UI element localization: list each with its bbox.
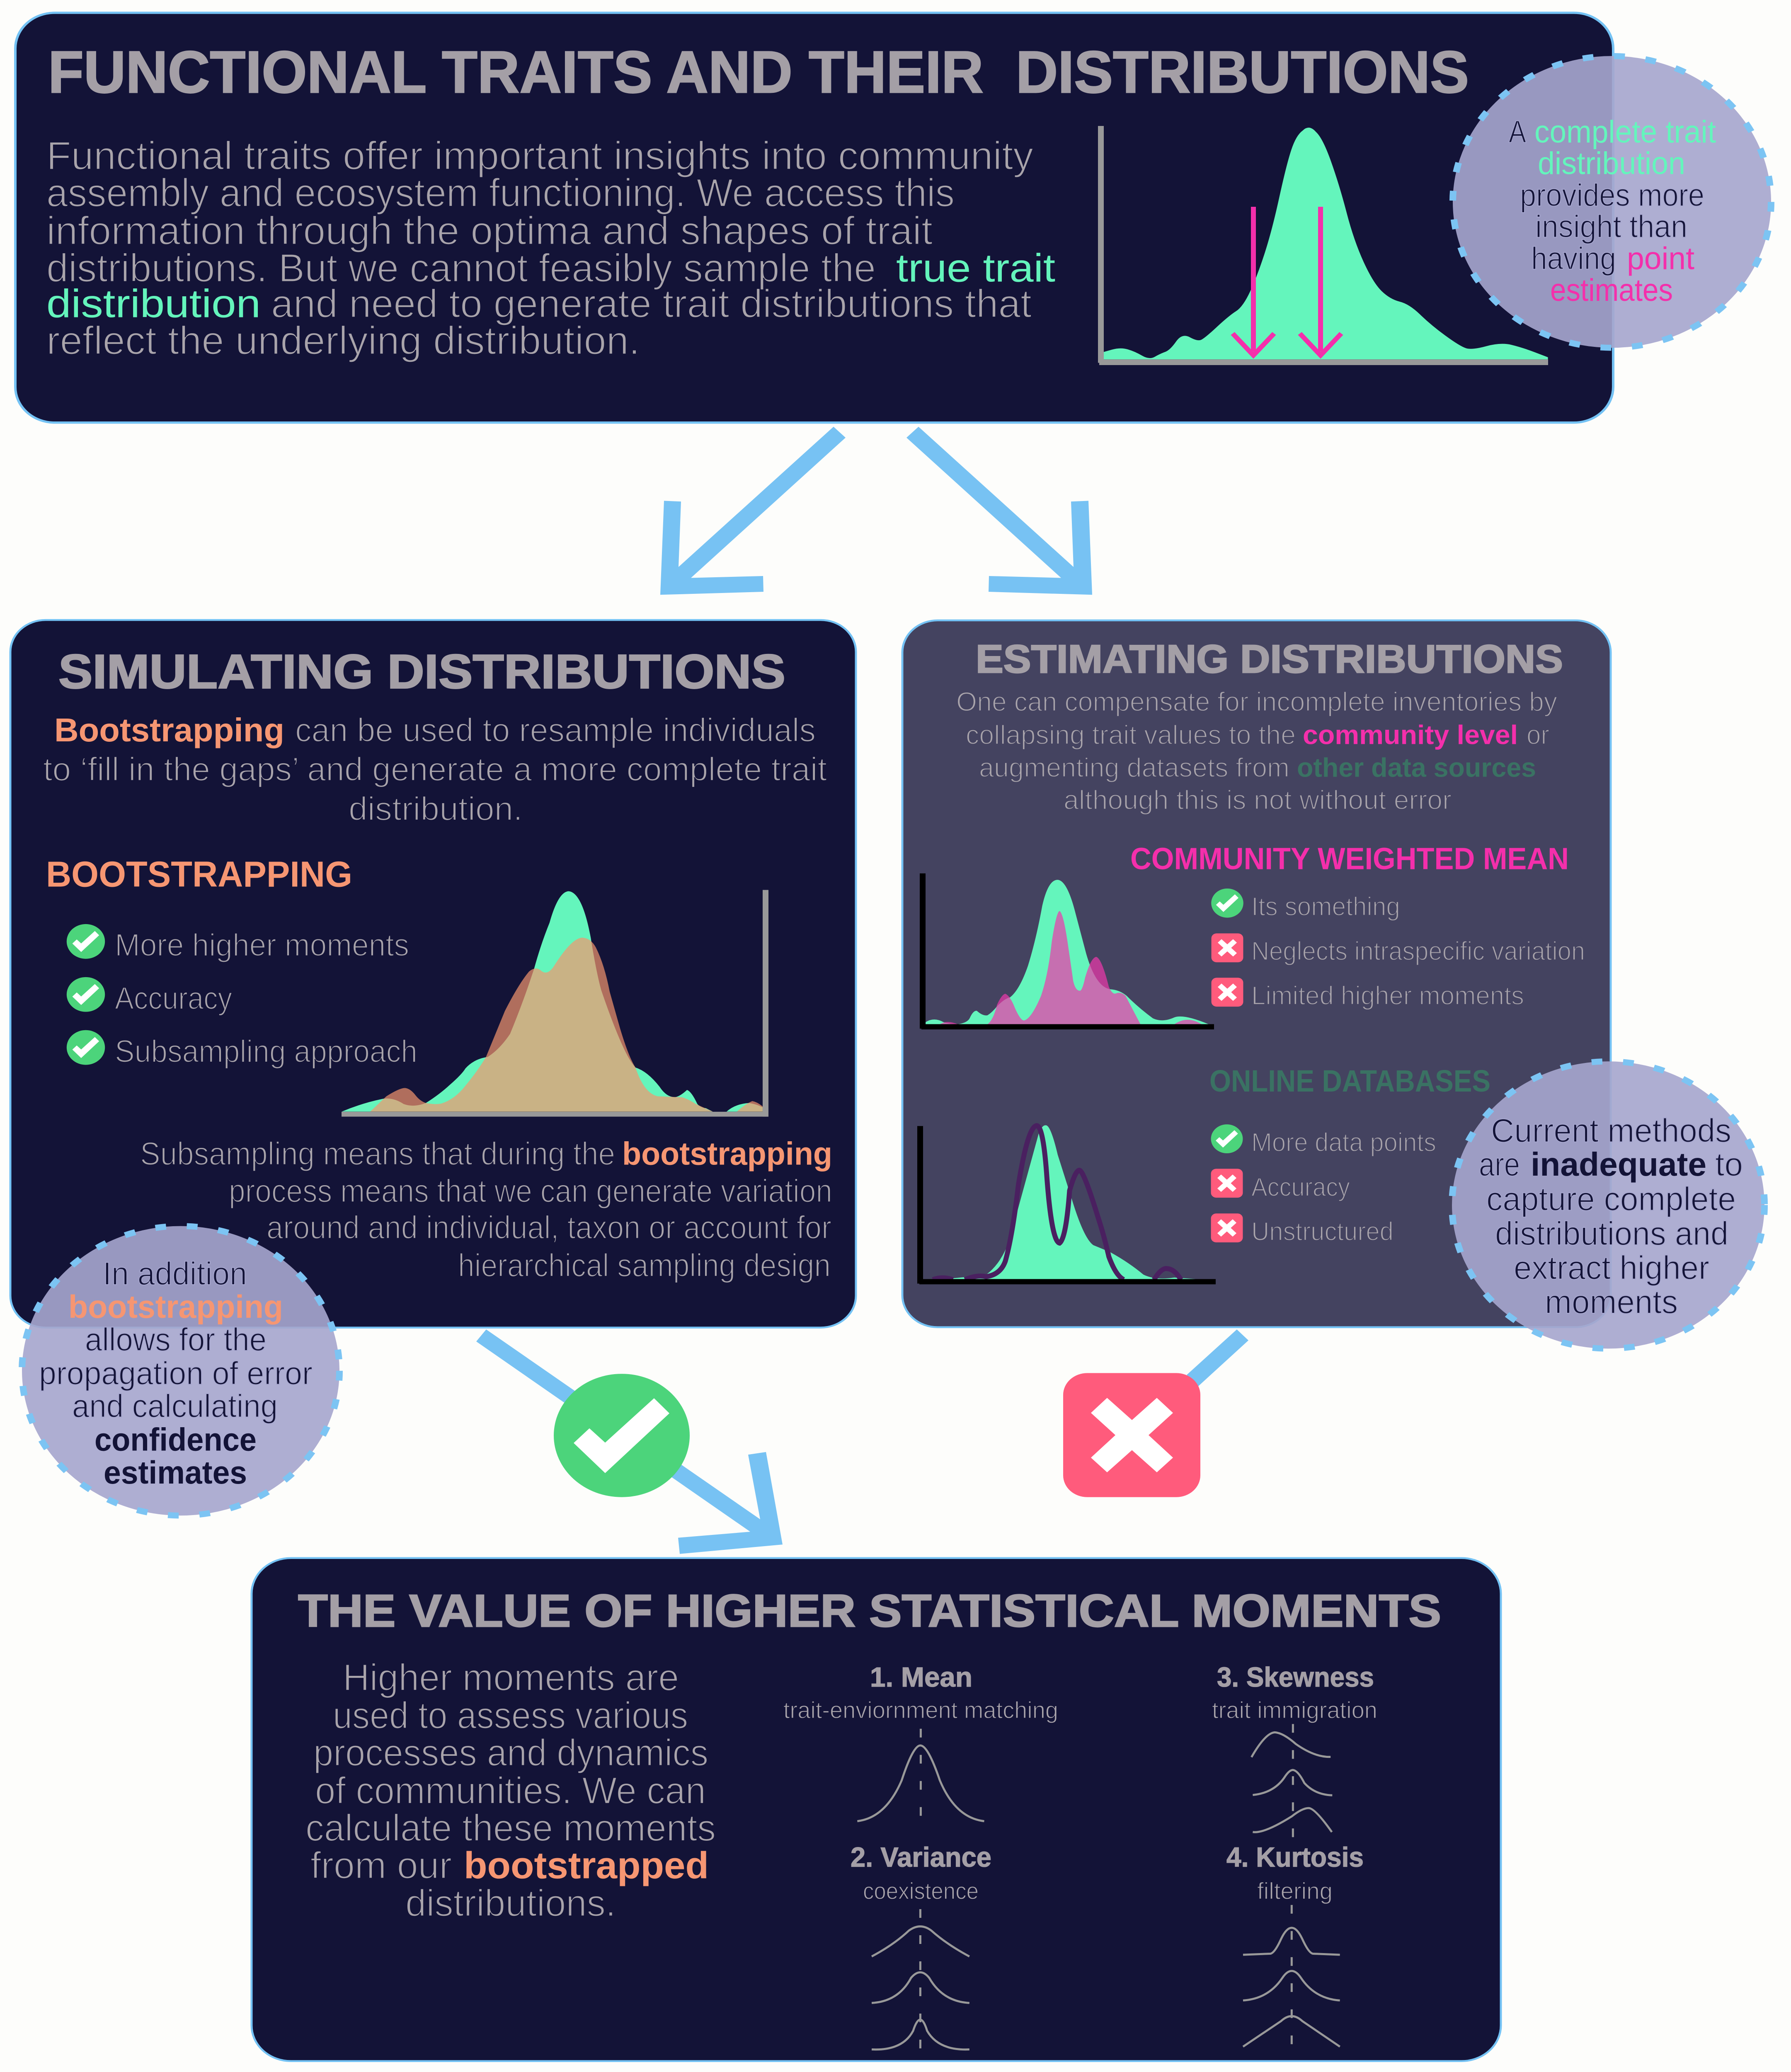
panel: value of higher statistical moments xyxy=(252,1558,1501,2061)
moment: mean: trait-enviornment matching xyxy=(783,1697,1058,1723)
heading: simulating distributions: SIMULATING DISTRIBUTIONS xyxy=(58,644,785,698)
list: community weighted mean pros and cons: Neglects intraspecific variation xyxy=(1251,937,1585,966)
text block: introduction: information through the optima and shapes of trait xyxy=(46,209,933,253)
icon: large check xyxy=(554,1374,690,1497)
text block: estimating intro xyxy=(956,687,1558,815)
text block: bootstrapping intro: to ‘fill in the gaps’ and generate a more complete trait xyxy=(43,750,827,788)
text block: subsampling: hierarchical sampling design xyxy=(458,1248,831,1283)
text block: bootstrapping intro: can be used to resample individuals xyxy=(295,712,816,748)
text block: estimating intro: although this is not without error xyxy=(1064,785,1452,815)
icon: cross xyxy=(1211,1213,1243,1242)
text block: estimating intro: collapsing trait values to the xyxy=(966,720,1296,750)
moment: skewness: 3. Skewness xyxy=(1217,1661,1374,1692)
text block: introduction: reflect the underlying distribution. xyxy=(46,319,640,363)
panel: estimating distributions xyxy=(902,620,1611,1327)
text block: estimating intro: community level xyxy=(1303,720,1518,750)
callout: current methods inadequate: are xyxy=(1479,1146,1520,1183)
arrow: point estimate one xyxy=(1233,207,1274,355)
callout: current methods inadequate: Current methods xyxy=(1491,1112,1731,1149)
list: online databases pros and cons: Accuracy xyxy=(1251,1173,1350,1202)
text block: estimating intro: One can compensate for incomplete inventories by xyxy=(956,687,1558,717)
icon: check xyxy=(1211,1124,1243,1153)
callout: current methods inadequate xyxy=(1452,1061,1764,1348)
text block: subsampling: Subsampling means that during the xyxy=(140,1136,615,1172)
callout: bootstrapping error propagation: confidence xyxy=(95,1422,257,1457)
text block: subsampling xyxy=(140,1136,832,1283)
text block: estimating intro: or xyxy=(1527,720,1549,750)
text block: introduction: and need to generate trait distributions that xyxy=(271,282,1032,326)
callout: complete trait distribution: estimates xyxy=(1550,272,1673,307)
callout: bootstrapping error propagation: allows for the xyxy=(85,1322,267,1358)
text block: subsampling: around and individual, taxon or account for xyxy=(267,1210,831,1246)
text block: higher moments: Higher moments are xyxy=(343,1657,679,1699)
callout: complete trait distribution: having xyxy=(1531,240,1616,276)
callout: current methods inadequate: moments xyxy=(1545,1283,1678,1320)
icon: cross xyxy=(1211,1169,1243,1198)
icon: check xyxy=(67,1030,105,1065)
list: bootstrapping benefits xyxy=(67,924,417,1069)
list: community weighted mean pros and cons: Its something xyxy=(1251,892,1400,921)
moment: variance: coexistence xyxy=(863,1878,979,1904)
text block: higher moments: calculate these moments xyxy=(305,1807,716,1849)
moment: mean xyxy=(783,1661,1058,1830)
callout: complete trait distribution xyxy=(1453,56,1771,348)
icon: check xyxy=(1211,888,1243,917)
list: online databases pros and cons: Unstructured xyxy=(1251,1217,1394,1246)
heading: community weighted mean: COMMUNITY WEIGHTED MEAN xyxy=(1130,841,1569,876)
callout: bootstrapping error propagation: and calculating xyxy=(72,1388,278,1424)
callout: current methods inadequate: distributions and xyxy=(1495,1215,1728,1252)
list: bootstrapping benefits: Accuracy xyxy=(115,980,232,1016)
panel: simulating distributions xyxy=(10,620,856,1328)
arrow: point estimate two xyxy=(1300,207,1341,355)
icon: check xyxy=(67,977,105,1012)
text block: estimating intro: augmenting datasets from xyxy=(979,753,1289,783)
moment: skewness: trait immigration xyxy=(1212,1697,1377,1723)
callout: complete trait distribution: point xyxy=(1627,240,1694,276)
moment: kurtosis xyxy=(1226,1842,1364,2053)
text block: higher moments: of communities. We can xyxy=(315,1770,706,1812)
moment: variance: 2. Variance xyxy=(851,1842,991,1873)
moment: variance xyxy=(851,1842,991,2055)
panel: functional traits xyxy=(15,13,1613,423)
text block: subsampling: process means that we can generate variation xyxy=(229,1173,832,1209)
heading: online databases: ONLINE DATABASES xyxy=(1209,1063,1490,1098)
arrow: bootstrapping to higher moments xyxy=(476,1329,783,1554)
moment: mean: 1. Mean xyxy=(870,1661,972,1692)
callout: current methods inadequate: extract higher xyxy=(1514,1249,1709,1286)
callout: complete trait distribution: A xyxy=(1509,114,1526,149)
callout: bootstrapping error propagation: propagation of error xyxy=(39,1356,313,1392)
callout: bootstrapping error propagation xyxy=(22,1226,339,1515)
list: community weighted mean pros and cons: Limited higher moments xyxy=(1251,981,1524,1010)
callout: current methods inadequate: to xyxy=(1715,1146,1743,1183)
text block: introduction: distributions. But we cannot feasibly sample the xyxy=(46,246,876,290)
chart: bootstrapped distribution xyxy=(342,890,768,1117)
callout: complete trait distribution: complete trait xyxy=(1534,114,1716,149)
heading: bootstrapping: BOOTSTRAPPING xyxy=(46,854,352,894)
chart: online databases xyxy=(917,1125,1216,1284)
text block: introduction: Functional traits offer important insights into community xyxy=(46,134,1033,178)
chart: true trait distribution with point estimates xyxy=(1098,126,1548,365)
chart: community weighted mean xyxy=(920,874,1214,1029)
text block: higher moments: from our xyxy=(310,1845,452,1887)
text block: higher moments: processes and dynamics xyxy=(313,1732,708,1774)
icon: cross xyxy=(1212,933,1243,962)
text block: subsampling: bootstrapping xyxy=(622,1136,832,1172)
text block: introduction: true trait xyxy=(896,246,1055,290)
callout: current methods inadequate: inadequate xyxy=(1531,1146,1706,1183)
list: bootstrapping benefits: Subsampling approach xyxy=(115,1034,417,1069)
arrow: to simulating distributions xyxy=(660,427,846,595)
callout: bootstrapping error propagation: bootstrapping xyxy=(68,1289,283,1325)
text block: bootstrapping intro xyxy=(43,712,827,827)
list: online databases pros and cons: More data points xyxy=(1251,1128,1436,1157)
moment: kurtosis: filtering xyxy=(1257,1878,1333,1904)
text block: introduction: distribution xyxy=(46,282,261,326)
arrow: to estimating distributions xyxy=(906,427,1092,595)
icon: large cross xyxy=(1063,1373,1200,1497)
text block: estimating intro: other data sources xyxy=(1297,753,1536,783)
title: functional traits and their distributions: FUNCTIONAL TRAITS AND THEIR DISTRIBUTIONS xyxy=(48,39,1469,105)
text block: introduction: assembly and ecosystem functioning. We access this xyxy=(46,171,955,215)
list: bootstrapping benefits: More higher moments xyxy=(115,927,409,962)
arrow: estimating stub xyxy=(1187,1329,1248,1387)
text block: bootstrapping intro: Bootstrapping xyxy=(54,712,284,748)
icon: cross xyxy=(1212,978,1243,1007)
text block: higher moments: used to assess various xyxy=(333,1695,688,1737)
heading: estimating distributions: ESTIMATING DISTRIBUTIONS xyxy=(976,637,1563,681)
icon: check xyxy=(67,924,105,959)
callout: complete trait distribution: insight than xyxy=(1535,208,1687,244)
list: online databases pros and cons xyxy=(1211,1124,1436,1246)
moment: skewness xyxy=(1212,1661,1377,1842)
text block: bootstrapping intro: distribution. xyxy=(349,790,523,827)
text block: introduction xyxy=(46,134,1055,363)
callout: current methods inadequate: capture complete xyxy=(1486,1180,1736,1218)
text block: higher moments: distributions. xyxy=(405,1883,616,1924)
callout: complete trait distribution: provides more xyxy=(1520,177,1704,213)
moment: kurtosis: 4. Kurtosis xyxy=(1226,1842,1364,1873)
heading: value of higher statistical moments: THE VALUE OF HIGHER STATISTICAL MOMENTS xyxy=(298,1585,1441,1636)
callout: bootstrapping error propagation: estimates xyxy=(104,1455,247,1491)
callout: bootstrapping error propagation: In addition xyxy=(103,1256,247,1292)
callout: complete trait distribution: distribution xyxy=(1538,145,1685,181)
text block: higher moments xyxy=(305,1657,716,1924)
text block: higher moments: bootstrapped xyxy=(464,1845,709,1887)
list: community weighted mean pros and cons xyxy=(1211,888,1585,1010)
